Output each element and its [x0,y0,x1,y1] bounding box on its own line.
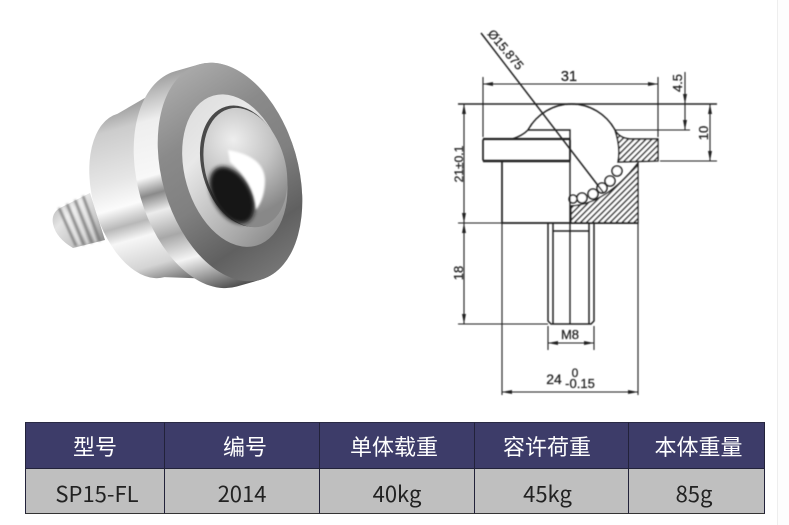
header: allowable load [475,422,629,469]
header: code [165,422,320,469]
specification table [25,422,765,514]
ball outline [528,104,615,130]
header: unit load [320,422,475,469]
metal body and flange [65,46,326,318]
dimension lines [458,72,717,395]
dimension labels: 24 [546,371,562,387]
flange front face [134,46,326,298]
value: model [25,469,165,514]
header: model [25,422,165,469]
technical drawing [451,27,717,395]
dimension labels: 4.5 [670,74,685,92]
header: body weight [629,422,765,469]
header: code: 编号 [223,430,267,462]
value: model: SP15-FL [55,476,139,508]
ball reflection [200,150,265,231]
dimension labels: 31 [561,69,577,85]
header: allowable load: 容许荷重 [503,430,591,462]
flange rim [110,46,326,305]
steel ball [190,98,301,237]
inner ring [165,82,304,259]
value: unit load: 40kg [373,476,421,508]
value: unit load [320,469,475,514]
value: allowable load: 45kg [523,476,572,508]
hatched housing section [571,130,658,223]
threaded stud section [548,223,594,324]
cylindrical body [68,87,219,307]
value: code: 2014 [218,476,266,508]
dimension arrowheads [462,82,712,394]
value: body weight [629,469,765,514]
header: body weight: 本体重量 [654,430,742,462]
ball socket shadow [186,95,299,237]
header: model: 型号 [73,430,117,462]
value: body weight: 85g [676,476,712,508]
flange and body outline [483,130,638,324]
value: allowable load [475,469,629,514]
header: unit load: 单体载重 [350,430,438,462]
value: code [165,469,320,514]
dimension labels: Ø15.875 [485,27,526,73]
threaded stud [53,193,105,248]
dimension labels: M8 [561,327,579,342]
dimension labels: 0 [572,366,579,380]
dimension labels: 10 [696,126,711,140]
dimension labels [451,27,711,391]
leader line: ball diameter [481,33,603,192]
dimension labels: 18 [451,266,466,280]
dimension labels: -0.15 [565,376,595,391]
bearing beads [569,166,622,203]
dimension labels: 21±0.1 [452,145,466,182]
